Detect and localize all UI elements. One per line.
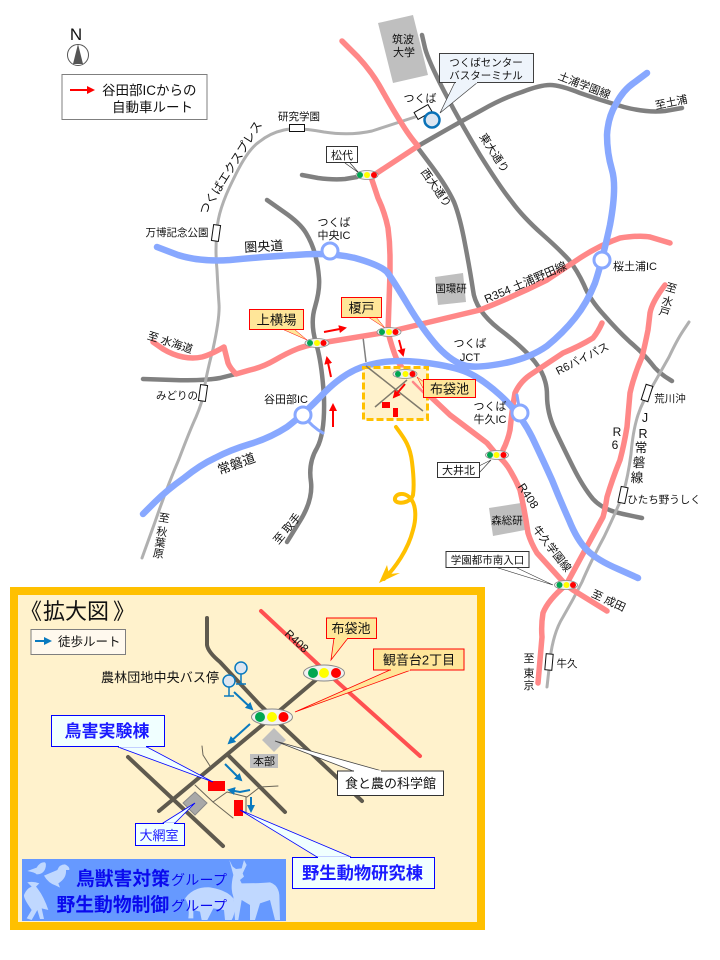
station: つくば: [404, 92, 440, 128]
map labels: JCT: [460, 352, 480, 364]
map labels: J: [642, 411, 648, 425]
banner text: グループ: [171, 872, 227, 888]
callout: bus terminal: [440, 54, 534, 113]
banner text: [56, 867, 227, 915]
map labels: つくば: [318, 216, 350, 229]
station: 万博記念公園: 万博記念公園: [146, 226, 208, 239]
callout: 野生動物研究棟: [240, 810, 434, 888]
station: 研究学園: [278, 110, 320, 132]
bus stop label: 農林団地中央バス停: [101, 670, 219, 685]
legend: car route: 谷田部ICからの: [102, 83, 196, 98]
label: 大井北: [438, 460, 491, 478]
map labels: 6: [612, 438, 619, 452]
callout: 観音台2丁目: 観音台2丁目: [383, 652, 455, 668]
banner text: 鳥獣害対策: [76, 867, 170, 889]
institute: 森総研: 森総研: [491, 514, 523, 527]
institute: 国環研: [435, 273, 467, 305]
station: ひたち野うしく: ひたち野うしく: [627, 494, 701, 506]
map labels: 至土浦: [654, 93, 689, 112]
map labels: つくばエクスプレス: [196, 119, 265, 217]
building: 大網室: [183, 792, 207, 815]
label: 布袋池: 布袋池: [430, 382, 469, 396]
signal: 学園都市南入口: [554, 580, 578, 590]
label: 榎戸: 榎戸: [348, 300, 375, 316]
signal: 観音台2丁目: [252, 709, 292, 725]
callout: 布袋池: [326, 618, 376, 660]
station: 荒川沖: 荒川沖: [654, 392, 686, 405]
label: 榎戸: [342, 298, 385, 328]
interchange: 桜土浦IC: [594, 252, 610, 268]
map labels: 至 秋葉原: [151, 511, 170, 559]
signal: 布袋池 enlarged: [304, 665, 344, 681]
callout: 食と農の科学館: 食と農の科学館: [345, 776, 436, 791]
legend: car route: 自動車ルート: [112, 100, 193, 115]
building: 本部: 本部: [253, 754, 275, 768]
map labels: 牛久IC: [474, 412, 507, 426]
railway lines: [142, 117, 689, 687]
callout: bus terminal: つくばセンター: [449, 57, 523, 69]
national and prefectural roads: [153, 41, 670, 683]
signal: 上横場: [305, 338, 329, 348]
map labels: 牛久学園線: [530, 523, 575, 575]
map labels: R: [638, 427, 648, 441]
station: 牛久: 牛久: [556, 657, 578, 670]
label: 学園都市南入口: 学園都市南入口: [451, 554, 524, 566]
building: 本部: [250, 728, 286, 768]
label: 上横場: 上横場: [257, 312, 296, 328]
map labels: 土浦学園線: [556, 69, 613, 102]
map labels: つくば: [454, 337, 486, 350]
label: 大井北: 大井北: [442, 463, 475, 477]
label: 布袋池: [417, 377, 476, 398]
callout: 観音台2丁目: [295, 649, 464, 712]
map labels: 中央IC: [318, 229, 351, 242]
station: 牛久: [545, 654, 578, 670]
panel title: 拡大図: [43, 599, 109, 624]
banner text: グループ: [171, 898, 227, 914]
callout: bus terminal: バスターミナル: [449, 70, 523, 82]
map labels: 至 水海道: [146, 328, 195, 356]
university block: [378, 15, 428, 83]
station: ひたち野うしく: [618, 486, 701, 506]
label: 上横場: [250, 310, 307, 340]
map labels: 磐: [633, 456, 645, 470]
callout: 食と農の科学館: [275, 741, 444, 796]
callout: 布袋池: 布袋池: [331, 621, 371, 636]
signal: 松代: [356, 170, 378, 180]
expressways: [143, 73, 647, 578]
map labels: 谷田部IC: [264, 393, 308, 406]
label: 学園都市南入口: [446, 552, 553, 585]
enlarged roads: [128, 611, 420, 846]
institute: 森総研: [489, 503, 525, 536]
north compass: N: [70, 25, 82, 44]
map labels: 桜土浦IC: [613, 259, 657, 273]
callout: 大網室: 大網室: [139, 828, 179, 843]
walking route arrows: [225, 692, 252, 811]
station: みどりの: [156, 385, 208, 402]
map labels: 東大通り: [477, 131, 512, 175]
map labels: R: [613, 425, 622, 439]
map labels: 京: [524, 679, 534, 692]
icon: animal silhouettes: [24, 860, 280, 920]
callout: 鳥害実験棟: [52, 716, 213, 782]
label: R408: R408: [282, 628, 310, 656]
map labels: 至 水戸: [656, 280, 678, 319]
gray local roads: [143, 35, 682, 542]
station: つくば: つくば: [404, 92, 436, 105]
interchange: 谷田部IC: [295, 407, 311, 423]
map labels: つくば: [474, 400, 506, 413]
map labels: 西大通り: [418, 166, 455, 210]
signal: 榎戸: [377, 328, 401, 336]
map labels: 線: [631, 470, 644, 485]
institute: 国環研: 国環研: [435, 283, 467, 295]
station: 荒川沖: [641, 384, 686, 405]
label: 松代: 松代: [331, 148, 353, 162]
legend: car route: [62, 74, 207, 120]
legend: walking route: 徒歩ルート: [58, 634, 121, 649]
map labels: 至 取手: [270, 510, 304, 547]
map labels: [146, 69, 689, 692]
map labels: 常: [635, 441, 647, 455]
map labels: 東: [524, 667, 534, 680]
north compass: [68, 25, 88, 66]
connector arrow to enlarged map: [379, 427, 415, 583]
car route arrows: [324, 328, 405, 427]
map labels: 常磐道: [216, 450, 257, 477]
icon: bus stops: [223, 662, 247, 696]
station: 研究学園: 研究学園: [278, 110, 320, 123]
banner text: 野生動物制御: [56, 894, 169, 915]
legend: walking route: [31, 630, 126, 654]
panel title: 《: [20, 599, 42, 624]
map labels: R408: [515, 482, 540, 511]
map labels: 至: [524, 653, 534, 665]
map labels: 圏央道: [244, 238, 284, 255]
university block: 大学: [393, 45, 415, 59]
station: 万博記念公園: [146, 225, 221, 241]
university block: 筑波: [392, 32, 414, 46]
interchange: つくば中央IC: [322, 243, 338, 259]
interchange: つくば牛久IC: [512, 405, 528, 421]
callout: 鳥害実験棟: 鳥害実験棟: [64, 721, 150, 741]
map labels: R354 土浦野田線: [483, 259, 569, 306]
map labels: 至 成田: [589, 587, 628, 614]
signal: 大井北: [486, 450, 508, 460]
station: みどりの: みどりの: [156, 390, 198, 402]
panel: enlarged map: [14, 591, 481, 926]
panel title: 》: [113, 599, 135, 624]
building: 鳥害実験棟: [208, 781, 225, 791]
building: 野生動物研究棟: [234, 800, 243, 816]
map labels: R6バイパス: [554, 340, 611, 378]
signal: 布袋池: [393, 370, 417, 378]
inset locator box: [364, 366, 429, 420]
callout: 大網室: [136, 803, 195, 846]
label: 松代: [326, 146, 359, 173]
banner: research groups: [22, 859, 286, 921]
callout: 野生動物研究棟: 野生動物研究棟: [302, 863, 423, 883]
